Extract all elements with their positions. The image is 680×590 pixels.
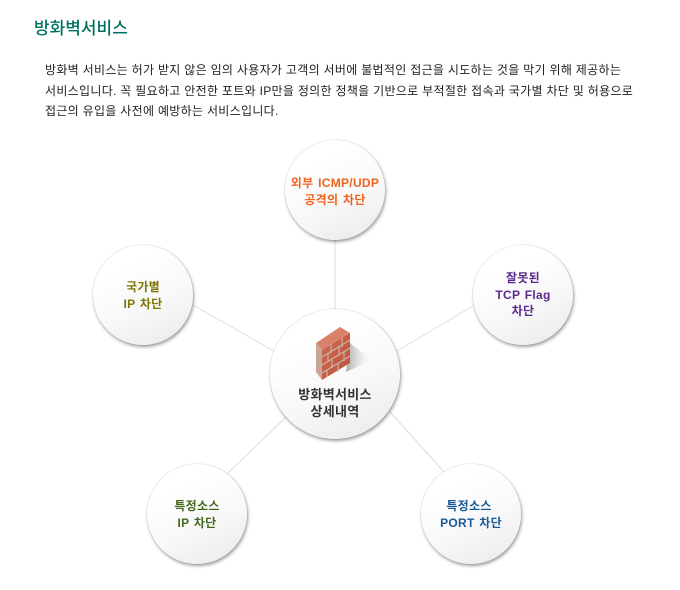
node: external ICMP/UDP: 외부 ICMP/UDP [291, 176, 379, 190]
node: country block [93, 245, 193, 345]
node: external ICMP/UDP: 공격의 차단 [304, 192, 366, 206]
center node: firewall service detail: 상세내역 [310, 404, 360, 419]
node: country block: 국가별 [126, 280, 160, 294]
node: source port block [421, 464, 521, 564]
text block: description: 서비스입니다. 꼭 필요하고 안전한 포트와 IP만을 정의한 정책을 기반으로 부적절한 접속과 국가별 차단 및 허용으로 [45, 84, 633, 98]
center node: firewall service detail: 방화벽서비스 [298, 387, 372, 402]
node: source port block: PORT 차단 [440, 516, 502, 530]
text block: description: 접근의 유입을 사전에 예방하는 서비스입니다. [45, 104, 279, 118]
center node: firewall service detail [270, 309, 400, 439]
node: bad TCP flag [473, 245, 573, 345]
node: bad TCP flag: 차단 [512, 304, 534, 318]
node: bad TCP flag: TCP Flag [495, 288, 551, 302]
node: source port block: 특정소스 [446, 499, 492, 513]
node: source IP block: IP 차단 [177, 516, 217, 530]
title: 방화벽서비스 [34, 19, 128, 38]
icon: brick wall [316, 327, 365, 380]
node: country block: IP 차단 [123, 296, 163, 310]
text block: description [45, 63, 633, 118]
node: external ICMP/UDP [285, 140, 385, 240]
node: bad TCP flag: 잘못된 [506, 271, 540, 285]
text block: description: 방화벽 서비스는 허가 받지 않은 임의 사용자가 고객의 서버에 불법적인 접근을 시도하는 것을 막기 위해 제공하는 [45, 63, 621, 77]
node: source IP block [147, 464, 247, 564]
node: source IP block: 특정소스 [174, 499, 220, 513]
